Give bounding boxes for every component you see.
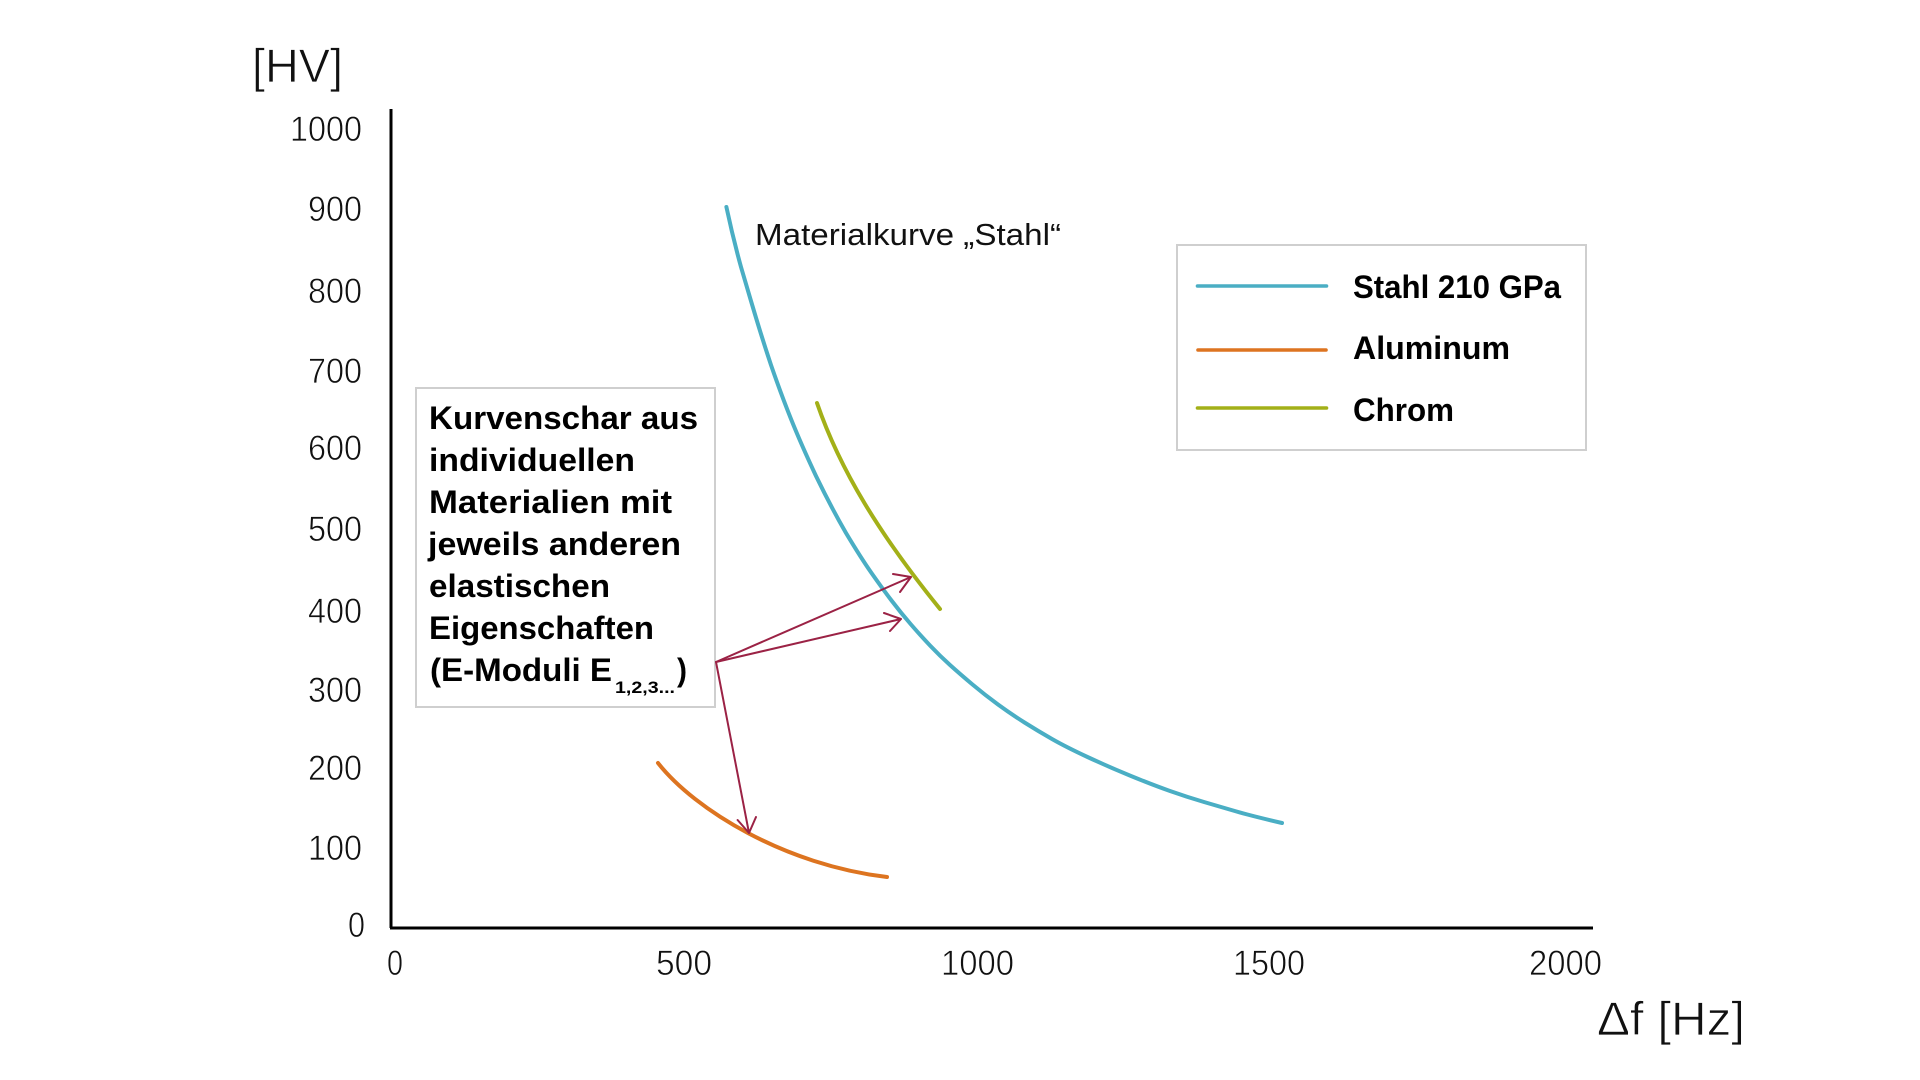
legend panel [1177,245,1586,450]
x axis tick labels [387,944,1602,983]
curve: Chrom [817,403,940,609]
y axis tick labels: 1000 [290,110,362,149]
y axis tick labels: 0 [348,906,365,945]
y axis tick labels: 800 [308,272,362,311]
callout box: Kurvenschar: ) [677,652,687,688]
legend entry: Aluminum: Aluminum [1353,330,1510,366]
callout box: Kurvenschar [416,388,715,707]
y axis tick labels [290,110,365,945]
y axis title: [HV] [252,39,343,92]
x axis tick labels: 500 [656,944,712,983]
callout box: Kurvenschar: elastischen [429,568,610,604]
x axis tick labels: 1500 [1233,944,1305,983]
y axis tick labels: 300 [308,671,362,710]
label: Materialkurve Stahl: Materialkurve „Stahl“ [755,217,1061,252]
callout box: Kurvenschar: 1,2,3... [615,678,675,697]
callout box: Kurvenschar: Eigenschaften [429,610,654,646]
callout box: Kurvenschar: (E-Moduli E [430,652,612,688]
curve: Aluminum [658,763,887,877]
x axis title: Δf [Hz] [1597,992,1745,1045]
chart axes [390,109,1593,928]
x axis tick labels: 1000 [941,944,1014,983]
y axis tick labels: 600 [308,429,362,468]
legend entry: Chrom: Chrom [1353,392,1454,428]
y axis tick labels: 200 [308,749,362,788]
y axis tick labels: 500 [308,510,362,549]
y axis tick labels: 900 [308,190,362,229]
y axis tick labels: 700 [308,352,362,391]
callout box: Kurvenschar: Materialien mit [429,484,672,520]
curve: Stahl [726,207,1282,823]
x axis tick labels: 0 [387,944,403,983]
x axis tick labels: 2000 [1529,944,1602,983]
y axis tick labels: 400 [308,592,362,631]
callout box: Kurvenschar: individuellen [429,442,635,478]
legend entry: Stahl: Stahl 210 GPa [1353,269,1561,305]
arrows from callout to curves [716,574,911,833]
y axis tick labels: 100 [308,829,362,868]
callout box: Kurvenschar: jeweils anderen [427,526,681,562]
callout box: Kurvenschar: Kurvenschar aus [429,400,698,436]
